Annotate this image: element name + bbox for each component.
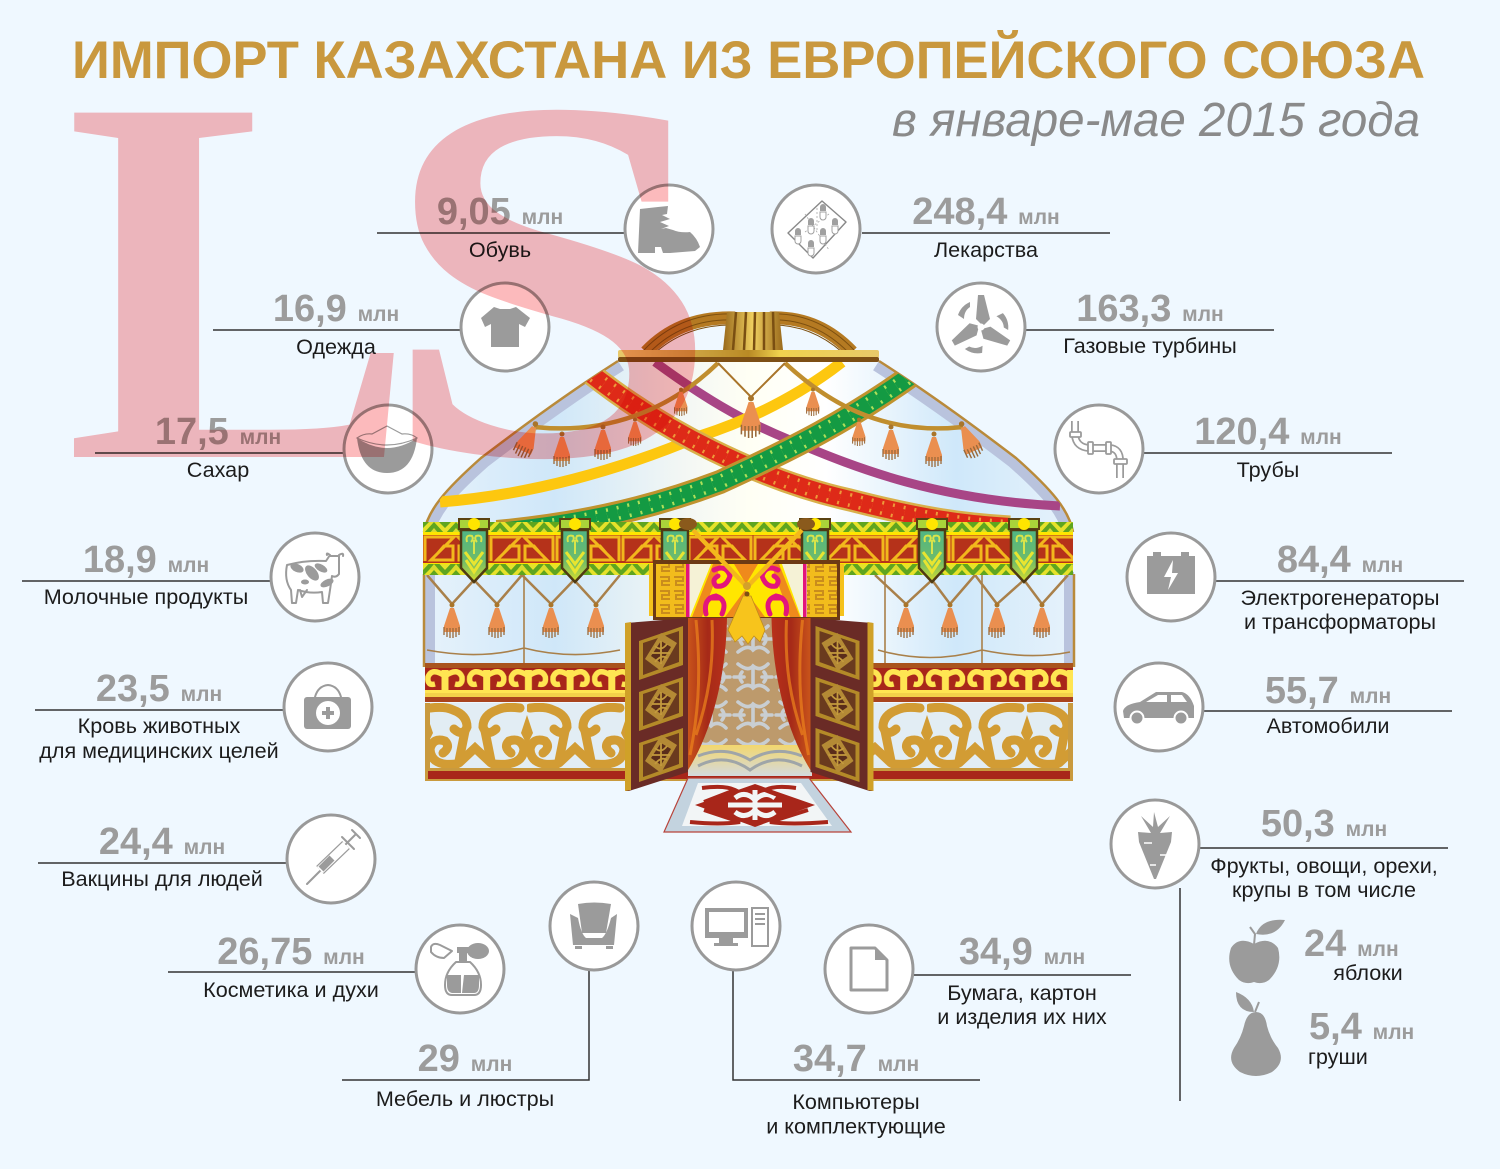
icon: syringe bbox=[287, 815, 375, 903]
icon: car bbox=[1115, 663, 1203, 751]
label: Лекарства bbox=[934, 237, 1039, 262]
value: 55,7 млн bbox=[1265, 670, 1391, 712]
sub-item: яблоки bbox=[1229, 920, 1403, 985]
item: вакцины bbox=[38, 815, 375, 903]
doorway bbox=[688, 618, 812, 776]
label: Бумага, картон bbox=[947, 980, 1097, 1005]
label: Фрукты, овощи, орехи, bbox=[1210, 853, 1438, 878]
item: одежда bbox=[213, 283, 549, 371]
item: лекарства bbox=[772, 185, 1110, 273]
yurt dome bbox=[424, 361, 1073, 532]
value: 50,3 млн bbox=[1261, 803, 1387, 845]
door canopy bbox=[649, 560, 844, 620]
value: 248,4 млн bbox=[912, 191, 1060, 233]
label: и трансформаторы bbox=[1244, 609, 1436, 634]
garlands and tassels bbox=[512, 363, 985, 467]
label: яблоки bbox=[1333, 960, 1403, 985]
item: компьютеры bbox=[692, 882, 980, 1138]
value: 34,7 млн bbox=[793, 1038, 919, 1080]
icon: computer bbox=[692, 882, 780, 970]
value: 29 млн bbox=[418, 1038, 512, 1080]
item: косметика bbox=[168, 925, 504, 1013]
icon: pills bbox=[772, 185, 860, 273]
icon: t-shirt bbox=[461, 283, 549, 371]
label: Обувь bbox=[469, 237, 531, 262]
value: 5,4 млн bbox=[1309, 1006, 1414, 1048]
value: 9,05 млн bbox=[437, 191, 563, 233]
icon: turbine bbox=[937, 283, 1025, 371]
icon: medical bag bbox=[284, 663, 372, 751]
label: и комплектующие bbox=[766, 1114, 946, 1138]
item: молочные продукты bbox=[22, 533, 359, 621]
label: Кровь животных bbox=[78, 713, 240, 738]
icon: apple bbox=[1229, 920, 1285, 983]
ornament bands bbox=[425, 663, 1073, 781]
item: электрогенераторы bbox=[1127, 533, 1464, 634]
lattice walls bbox=[424, 572, 1074, 667]
label: Одежда bbox=[296, 334, 377, 359]
icon: paper bbox=[825, 925, 913, 1013]
label: и изделия их них bbox=[937, 1004, 1107, 1029]
right door and curtain bbox=[772, 618, 874, 791]
icon: pear bbox=[1231, 992, 1281, 1076]
label: Автомобили bbox=[1266, 713, 1390, 738]
value: 84,4 млн bbox=[1277, 539, 1403, 581]
item: обувь bbox=[377, 185, 713, 273]
label: Вакцины для людей bbox=[61, 866, 263, 891]
label: Электрогенераторы bbox=[1240, 585, 1440, 610]
title: ИМПОРТ КАЗАХСТАНА ИЗ ЕВРОПЕЙСКОГО СОЮЗА bbox=[72, 29, 1425, 90]
icon: sugar bowl bbox=[344, 405, 432, 493]
item: кровь животных bbox=[35, 663, 372, 763]
item: газовые турбины bbox=[937, 283, 1274, 371]
icon: cow bbox=[271, 533, 359, 621]
value: 23,5 млн bbox=[96, 668, 222, 710]
carpet bbox=[664, 778, 851, 832]
value: 16,9 млн bbox=[273, 288, 399, 330]
green band bbox=[497, 372, 916, 532]
label: Сахар bbox=[187, 457, 249, 482]
pendants bbox=[458, 518, 1040, 582]
label: Мебель и люстры bbox=[376, 1086, 554, 1111]
door rope tassel bbox=[679, 518, 815, 644]
value: 18,9 млн bbox=[83, 539, 209, 581]
watermark: L bbox=[65, 0, 416, 571]
label: Молочные продукты bbox=[44, 584, 248, 609]
label: Компьютеры bbox=[792, 1089, 920, 1114]
red band bbox=[585, 369, 1010, 527]
value: 24 млн bbox=[1304, 923, 1399, 965]
item: мебель bbox=[342, 882, 638, 1111]
value: 34,9 млн bbox=[959, 931, 1085, 973]
item: автомобили bbox=[1115, 663, 1452, 751]
yellow ribbon bbox=[440, 362, 842, 502]
purple ribbon bbox=[655, 362, 1060, 506]
subtitle: в январе-мае 2015 года bbox=[892, 94, 1420, 147]
label: Трубы bbox=[1237, 457, 1299, 482]
icon: battery bbox=[1127, 533, 1215, 621]
illustration: yurt bbox=[423, 312, 1074, 832]
watermark: S bbox=[380, 0, 721, 567]
value: 120,4 млн bbox=[1194, 411, 1342, 453]
item: сахар bbox=[95, 405, 432, 493]
icon: carrot bbox=[1111, 800, 1199, 888]
icon: pipes bbox=[1055, 405, 1143, 493]
label: груши bbox=[1308, 1044, 1368, 1069]
label: Косметика и духи bbox=[203, 977, 379, 1002]
value: 24,4 млн bbox=[99, 821, 225, 863]
left door and curtain bbox=[625, 618, 727, 791]
ornamental belt bbox=[423, 522, 1073, 575]
item: фрукты bbox=[1111, 800, 1448, 1101]
label: Газовые турбины bbox=[1063, 333, 1237, 358]
watermark bbox=[65, 0, 721, 571]
label: крупы в том числе bbox=[1232, 877, 1416, 902]
yurt crown bbox=[644, 312, 854, 352]
value: 17,5 млн bbox=[155, 411, 281, 453]
value: 26,75 млн bbox=[217, 931, 365, 973]
item: трубы bbox=[1055, 405, 1392, 493]
icon: armchair bbox=[550, 882, 638, 970]
value: 163,3 млн bbox=[1076, 288, 1224, 330]
icon: perfume bbox=[416, 925, 504, 1013]
item: бумага bbox=[825, 925, 1131, 1029]
sub-item: груши bbox=[1231, 992, 1414, 1076]
top bar bbox=[618, 350, 879, 362]
label: для медицинских целей bbox=[39, 738, 279, 763]
icon: boot bbox=[625, 185, 713, 273]
